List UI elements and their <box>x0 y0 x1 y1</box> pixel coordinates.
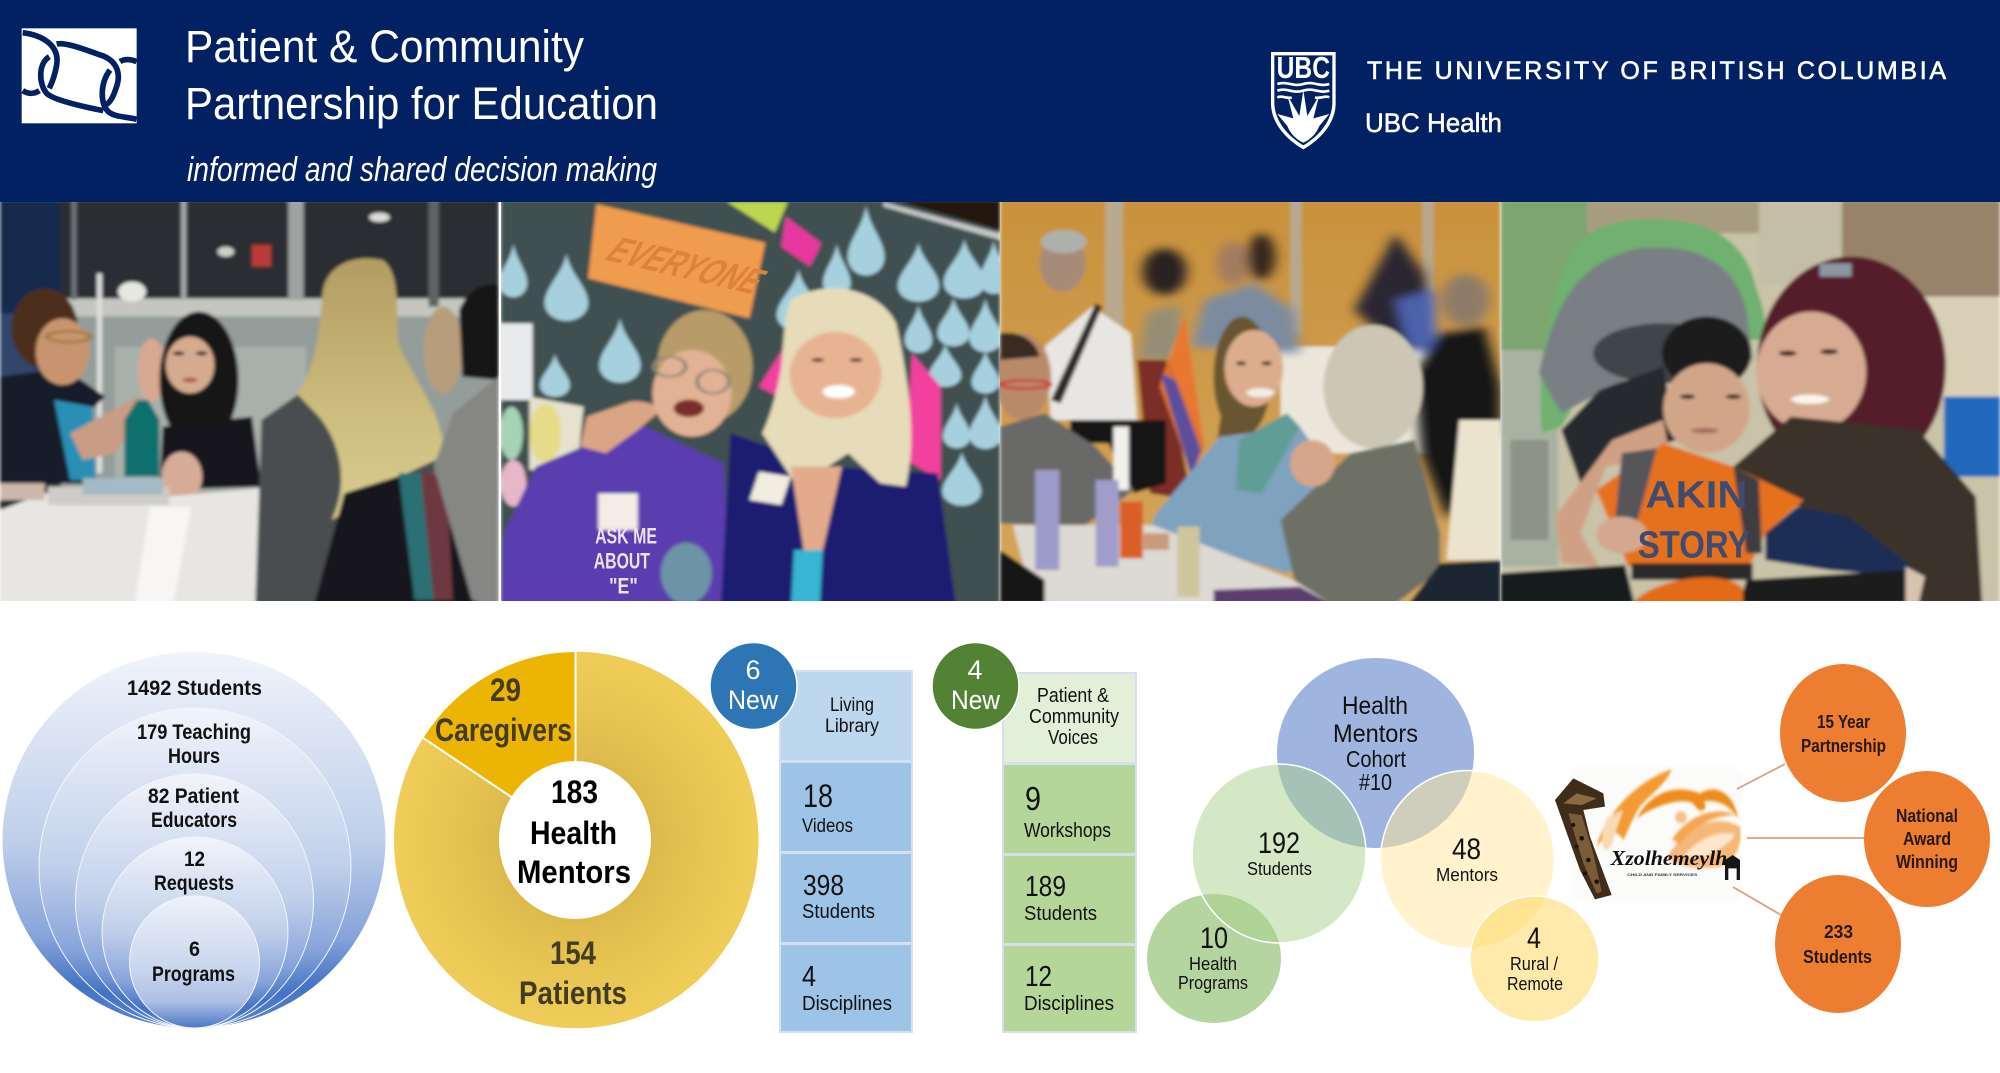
circle: Health Mentors Cohort #10: #10 <box>1359 769 1392 795</box>
icon: house <box>1725 855 1740 880</box>
small caption: CHILD AND FAMILY SERVICES <box>1627 873 1698 877</box>
label: 192 Students: Students <box>1247 859 1312 879</box>
UBC Health label: UBC Health <box>1365 108 1502 138</box>
header cell: Patient & Community Voices: Voices <box>1048 727 1098 749</box>
donut hole <box>499 761 651 919</box>
header banner <box>0 0 2000 202</box>
label: 48 Mentors: 48 <box>1452 833 1481 866</box>
cell: 4 Disciplines: Disciplines <box>802 993 892 1015</box>
label: 4 Rural / Remote: 4 <box>1527 922 1541 955</box>
label: 179 Teaching Hours: 179 Teaching <box>137 721 251 744</box>
badge: 6 New: 6 <box>745 655 761 685</box>
photo strip <box>0 200 1007 610</box>
shirt text: ASK ME ABOUT E <box>594 528 656 594</box>
slice: caregivers <box>422 651 576 840</box>
slice: patients <box>393 651 759 1029</box>
icon: PCPE chain logo <box>22 28 137 123</box>
circle: 233 Students: 233 <box>1824 922 1853 942</box>
cell: 12 Disciplines: Disciplines <box>1024 993 1114 1015</box>
title: programme name: Partnership for Education <box>185 78 658 129</box>
label: 183 Health Mentors: Health <box>530 815 617 851</box>
circle: Health Mentors Cohort #10: Mentors <box>1333 720 1418 748</box>
cell: 398 Students: 398 <box>803 870 844 902</box>
header cell: Living Library: Library <box>825 716 879 737</box>
cell: 398 Students <box>781 854 911 942</box>
cell: 9 Workshops: 9 <box>1025 780 1041 817</box>
header cell: Living Library: Living <box>830 695 874 716</box>
logo: Xyolhemeylh <box>1555 767 1742 902</box>
photo: roundtable with rainbow flag <box>994 200 1501 610</box>
connector lines <box>1733 764 1864 915</box>
concentric stats chart <box>2 652 386 1028</box>
cell: 189 Students <box>1004 856 1135 943</box>
icon: UBC shield: UBC <box>1277 51 1330 85</box>
circle: 15 Year Partnership <box>1780 664 1906 802</box>
label: 48 Mentors <box>1436 833 1498 885</box>
title: programme name <box>185 21 658 129</box>
orange eagle swooshes <box>1597 769 1741 868</box>
circle: 10 Health Programs <box>1147 894 1281 1023</box>
label: 6 Programs <box>152 938 235 986</box>
wordmark: Xzolhemeylh <box>1610 848 1727 870</box>
circle: 48 Mentors <box>1380 770 1554 948</box>
circle: Health Mentors Cohort #10 <box>1277 658 1474 848</box>
label: 4 Rural / Remote: Remote <box>1507 974 1563 994</box>
badge: 6 New <box>710 642 797 730</box>
cell: 189 Students: 189 <box>1025 871 1066 903</box>
panel: Living Library table <box>779 670 913 1033</box>
photo divider lines <box>499 202 501 601</box>
label: 154 Patients: 154 <box>550 935 596 971</box>
cell: 9 Workshops: Workshops <box>1024 820 1111 842</box>
header cell: Living Library <box>781 672 911 760</box>
label: 82 Patient Educators: 82 Patient <box>148 785 239 808</box>
photo: two women smiling <box>500 200 1007 610</box>
photo: boy in wheelchair with mother: STORY <box>1638 523 1749 566</box>
photo: two women smiling: ABOUT <box>594 549 650 574</box>
circle: 233 Students <box>1775 875 1901 1013</box>
label: 154 Patients <box>519 935 627 1011</box>
label: 179 Teaching Hours: Hours <box>168 745 220 768</box>
circle: 192 Students <box>1192 764 1366 943</box>
label: 6 Programs: Programs <box>152 963 235 986</box>
circle: 233 Students: Students <box>1803 947 1872 967</box>
label: 12 Requests: 12 <box>184 848 205 871</box>
label: 29 Caregivers <box>435 672 572 748</box>
label: 6 Programs: 6 <box>189 938 200 961</box>
cell: 18 Videos: Videos <box>802 816 853 837</box>
tagline: informed and shared decision making <box>187 151 657 189</box>
cell: 18 Videos <box>781 763 911 851</box>
circle: 15 Year Partnership: 15 Year <box>1817 712 1870 732</box>
panel: Patient and Community Voices table <box>1002 672 1137 1033</box>
label: 1492 Students: 1492 Students <box>127 677 262 700</box>
shirt text: AKIN STORY: AKIN <box>1645 473 1748 516</box>
shirt text: AKIN STORY <box>1638 481 1749 558</box>
badge: 4 New <box>932 642 1019 730</box>
circle: Health Mentors Cohort #10: Health <box>1342 692 1408 720</box>
circle: National Award Winning <box>1864 771 1990 907</box>
label: 154 Patients: Patients <box>519 975 627 1011</box>
header cell: Patient & Community Voices: Community <box>1029 706 1119 728</box>
cell: 189 Students: Students <box>1024 903 1097 925</box>
label: 183 Health Mentors: 183 <box>551 774 598 810</box>
badge: 4 New: New <box>951 685 1000 715</box>
label: 10 Health Programs: 10 <box>1200 922 1228 955</box>
label: 10 Health Programs: Programs <box>1178 973 1248 993</box>
circle: National Award Winning: Winning <box>1896 852 1958 872</box>
UBC wordmark: THE UNIVERSITY OF BRITISH COLUMBIA <box>1367 57 1946 85</box>
cell: 398 Students: Students <box>802 901 875 923</box>
label: 12 Requests <box>154 848 234 895</box>
circle: Health Mentors Cohort #10: Cohort <box>1346 746 1407 772</box>
circle: National Award Winning: Award <box>1903 829 1951 849</box>
label: 48 Mentors: Mentors <box>1436 865 1498 885</box>
circle: 15 Year Partnership: Partnership <box>1801 736 1886 756</box>
label: 82 Patient Educators <box>148 785 239 832</box>
label: 4 Rural / Remote <box>1507 922 1563 994</box>
label: 10 Health Programs <box>1178 922 1248 993</box>
photo: boy in wheelchair with mother <box>1501 200 2000 610</box>
shirt text: ASK ME ABOUT E: "E" <box>609 574 638 599</box>
venn diagram: Health Mentors Cohort 10 <box>1147 658 1599 1023</box>
label: 179 Teaching Hours <box>137 721 251 768</box>
cell: 4 Disciplines: 4 <box>802 961 816 993</box>
sign text: EVERYONE: EVERYONE <box>597 231 775 301</box>
label: 192 Students <box>1247 827 1312 879</box>
label: 82 Patient Educators: Educators <box>151 809 237 832</box>
label: 4 Rural / Remote: Rural / <box>1510 954 1558 974</box>
badge: 6 New: New <box>728 685 778 715</box>
label: 12 Requests: Requests <box>154 872 234 895</box>
label: 183 Health Mentors: Mentors <box>517 854 631 890</box>
badge: 4 New: 4 <box>967 655 983 685</box>
label: 183 Health Mentors <box>517 774 631 890</box>
cell: 18 Videos: 18 <box>803 778 833 814</box>
cell: 12 Disciplines: 12 <box>1025 961 1052 993</box>
label: 10 Health Programs: Health <box>1189 954 1237 974</box>
header cell: Patient & Community Voices: Patient & <box>1037 685 1110 707</box>
photo: table discussion <box>0 200 499 610</box>
circle: National Award Winning: National <box>1896 806 1958 826</box>
label: 29 Caregivers: 29 <box>490 672 521 708</box>
cell: 12 Disciplines <box>1004 946 1135 1031</box>
cell: 4 Disciplines <box>781 945 911 1031</box>
label: 29 Caregivers: Caregivers <box>435 712 572 748</box>
title: programme name: Patient & Community <box>185 21 584 72</box>
cell: 9 Workshops <box>1004 765 1135 853</box>
label: 192 Students: 192 <box>1258 827 1300 860</box>
photo: two women smiling: ASK ME <box>595 524 657 549</box>
circle: 4 Rural Remote <box>1470 896 1599 1022</box>
donut chart: health mentors <box>393 651 759 1029</box>
carved totem <box>1555 778 1612 899</box>
icon: UBC shield <box>1271 51 1336 149</box>
header cell: Patient & Community Voices <box>1004 674 1135 762</box>
